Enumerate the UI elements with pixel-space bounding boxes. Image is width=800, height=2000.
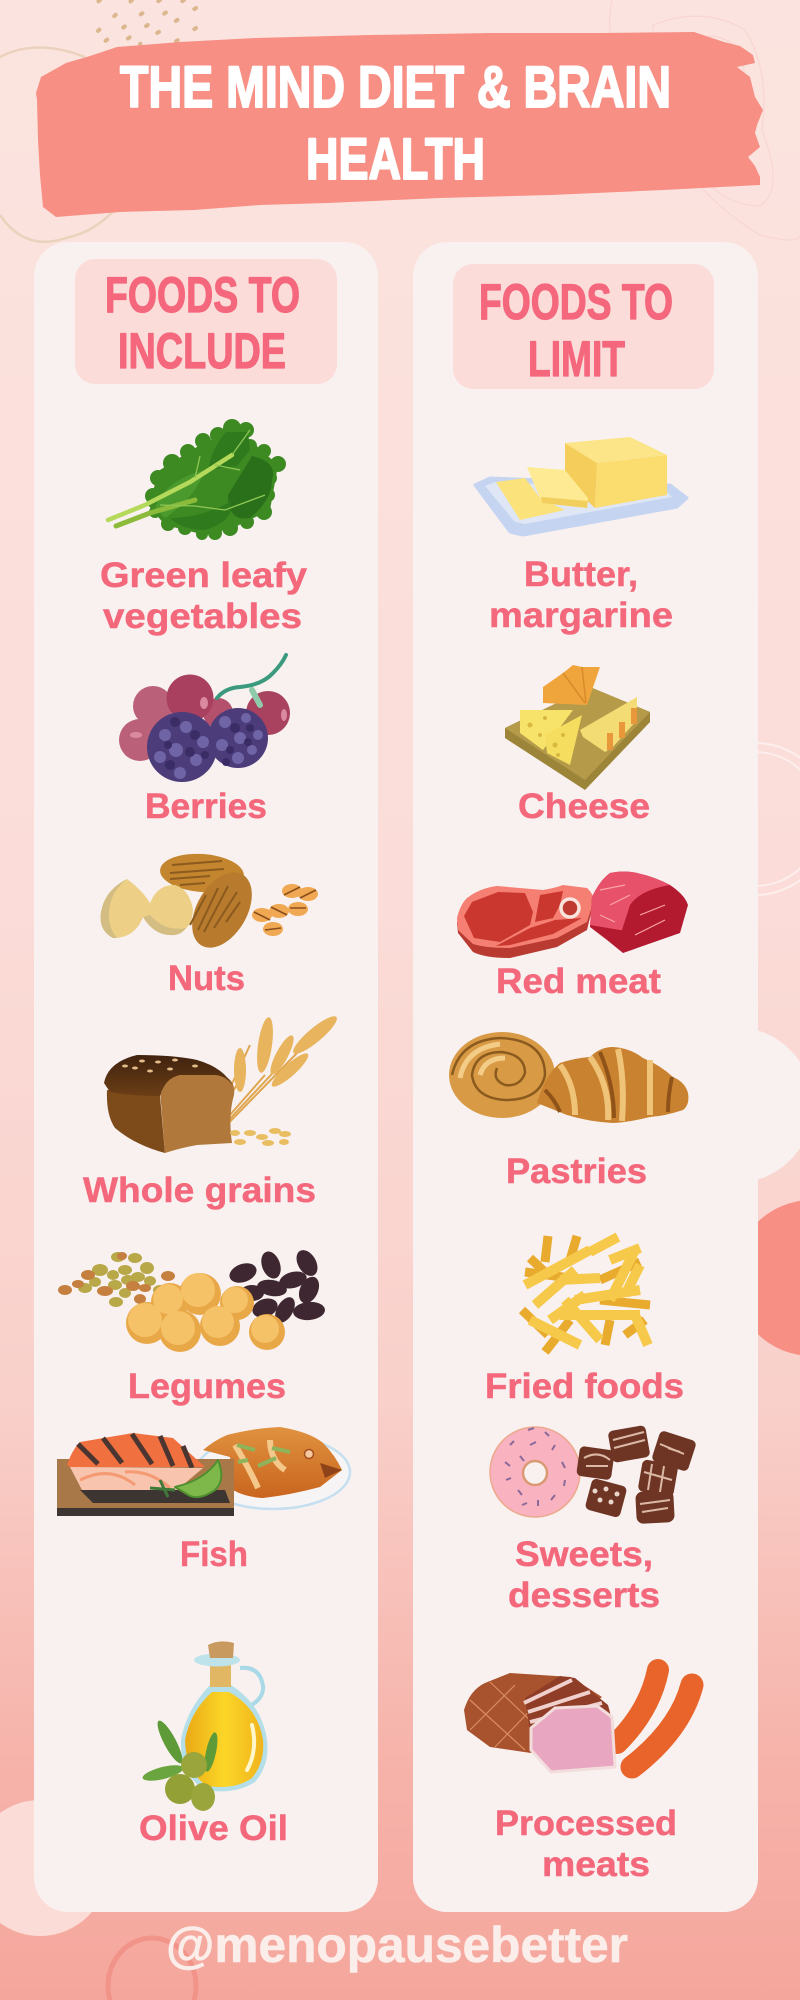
- label: Pastries: [506, 1152, 647, 1191]
- icon: ham and sausages: [464, 1670, 692, 1772]
- label: Berries: [145, 787, 267, 826]
- item: fried foods: [485, 1236, 684, 1406]
- panel background right: [413, 242, 758, 1912]
- decoration: contour lines: [610, 0, 800, 240]
- heading: foods to limit: FOODS TO: [479, 274, 673, 330]
- label: desserts: [508, 1576, 660, 1615]
- label: Olive Oil: [139, 1809, 288, 1848]
- icon: cinnamon roll and croissant: [449, 1032, 688, 1123]
- label: vegetables: [103, 597, 302, 636]
- label: Whole grains: [83, 1171, 316, 1210]
- panel background left: [34, 242, 378, 1912]
- label: Sweets,: [515, 1535, 653, 1574]
- heading: foods to include: FOODS TO: [105, 267, 300, 323]
- heading: foods to limit: LIMIT: [528, 331, 625, 387]
- label: [100, 556, 308, 636]
- panel: foods to limit: [413, 242, 758, 1912]
- decoration: salmon circle right: [734, 1200, 800, 1356]
- item: fish: [57, 1427, 350, 1574]
- decoration: gold dots: [84, 0, 196, 44]
- label: Processed: [495, 1804, 677, 1843]
- item: processed meats: [464, 1670, 692, 1884]
- item: nuts: [100, 851, 318, 998]
- item: legumes: [58, 1246, 326, 1406]
- label: Fish: [180, 1535, 248, 1574]
- label: Fried foods: [485, 1367, 684, 1406]
- icon: grapes and blackberries: [119, 655, 290, 782]
- heading: foods to include: INCLUDE: [118, 323, 286, 379]
- label: Butter,: [524, 555, 638, 594]
- banner shape: [36, 32, 763, 217]
- decoration: pale circle bottom left: [0, 1800, 108, 1936]
- item: olive oil: [139, 1641, 288, 1848]
- decoration: white arcs right: [679, 743, 800, 895]
- item: cheese: [505, 665, 650, 826]
- label: margarine: [489, 596, 673, 635]
- icon: cheese board: [505, 665, 650, 790]
- icon: donut and chocolates: [490, 1425, 697, 1524]
- item: pastries: [449, 1032, 688, 1191]
- icon: bread and wheat: [104, 1012, 341, 1153]
- icon: lentils, chickpeas, beans: [58, 1246, 326, 1352]
- label: meats: [542, 1845, 650, 1884]
- label: [495, 1804, 677, 1884]
- label: [489, 555, 673, 635]
- icon: french fries: [522, 1236, 650, 1352]
- label: Red meat: [496, 962, 661, 1001]
- title text: THE MIND DIET & BRAIN: [120, 55, 671, 120]
- title banner: [36, 32, 763, 217]
- panel: foods to include: [34, 242, 378, 1912]
- decoration: beige ring: [0, 48, 116, 242]
- footer handle: @menopausebetter: [166, 1917, 628, 1973]
- title text: [120, 55, 671, 192]
- item: green leafy vegetables: [100, 419, 308, 636]
- heading: foods to limit: [453, 264, 714, 389]
- icon: steak and roast: [457, 872, 688, 958]
- label: [508, 1535, 660, 1615]
- item: red meat: [457, 872, 688, 1001]
- icon: salmon on board and fish on plate: [57, 1427, 350, 1516]
- decoration: pale blob right: [657, 1027, 800, 1183]
- title text: HEALTH: [306, 127, 485, 192]
- item: sweets, desserts: [490, 1425, 697, 1615]
- icon: olive oil bottle: [141, 1641, 268, 1811]
- icon: kale leaf: [108, 419, 286, 540]
- label: Green leafy: [100, 556, 308, 595]
- decoration: ring bottom: [108, 1938, 196, 2000]
- item: berries: [119, 655, 290, 826]
- icon: nuts: [100, 851, 318, 958]
- item: whole grains: [83, 1012, 341, 1210]
- label: Nuts: [168, 959, 245, 998]
- label: Legumes: [128, 1367, 286, 1406]
- heading: foods to include: [75, 259, 337, 384]
- icon: butter on dish: [475, 437, 687, 535]
- item: butter, margarine: [475, 437, 687, 635]
- label: Cheese: [518, 787, 650, 826]
